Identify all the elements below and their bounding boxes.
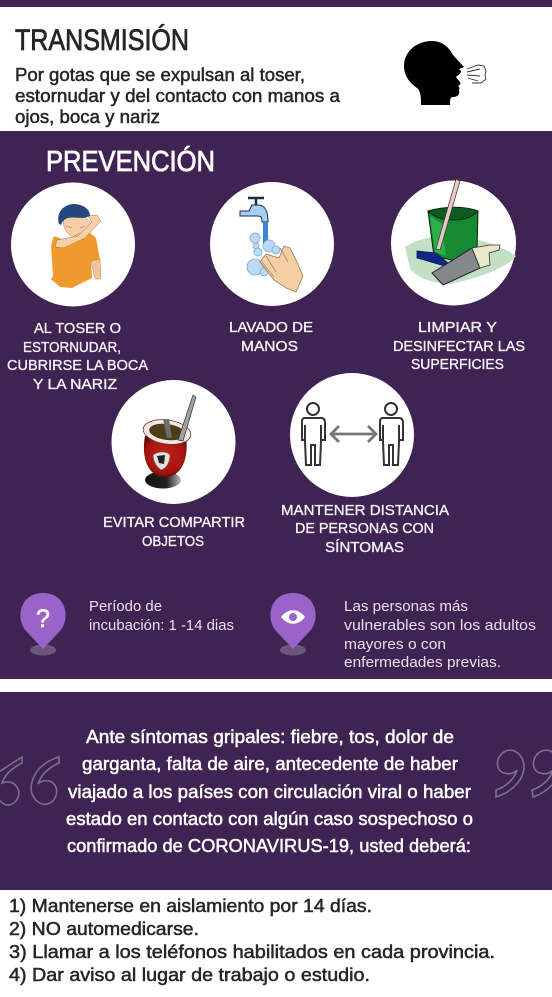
text block: cleaning label: LIMPIAR Y [418, 319, 497, 336]
text block: distance label [281, 502, 449, 556]
panel: transmission [0, 7, 552, 131]
text block: cover mouth label: ESTORNUDAR, [23, 339, 121, 356]
text block: instructions list: 4) Dar aviso al lugar de trabajo o estudio. [9, 965, 370, 985]
text block: transmission description: Por gotas que se expulsan al toser, [15, 65, 305, 85]
heading: transmission: TRANSMISIÓN [15, 24, 189, 57]
quote mark: right [496, 750, 552, 797]
quote mark: left [0, 757, 59, 805]
text block: incubation period: incubación: 1 -14 dias [89, 618, 234, 634]
text block: avoid sharing label: EVITAR COMPARTIR [103, 514, 245, 531]
text block: symptoms: estado en contacto con algún caso sospechoso o [66, 809, 473, 829]
text block: hand washing label: LAVADO DE [229, 319, 313, 336]
text block: symptoms: confirmado de CORONAVIRUS-19, usted deberá: [67, 836, 471, 856]
top band [0, 0, 552, 7]
text block: symptoms: Ante síntomas gripales: fiebre, tos, dolor de [86, 727, 454, 747]
text block: incubation period: Período de [89, 599, 162, 615]
text block: cover mouth label: AL TOSER O [34, 320, 121, 337]
text block: distance label: MANTENER DISTANCIA [281, 502, 449, 519]
icon: hand washing [210, 182, 334, 306]
text block: hand washing label [229, 319, 313, 355]
text block: vulnerable people: enfermedades previas. [344, 655, 501, 671]
icon: eye pin [270, 593, 316, 656]
text block: instructions list [9, 896, 495, 985]
text block: vulnerable people [344, 599, 536, 671]
text block: instructions list: 3) Llamar a los teléfonos habilitados en cada provincia. [9, 942, 495, 962]
icon: question pin [20, 593, 66, 656]
panel: symptoms [0, 692, 552, 890]
text block: cover mouth label: CUBRIRSE LA BOCA [7, 357, 148, 374]
heading: prevention: PREVENCIÓN [46, 145, 215, 178]
text block: vulnerable people: mayores o con [344, 637, 446, 653]
text block: symptoms: garganta, falta de aire, antecedente de haber [82, 754, 458, 774]
text block: distance label: DE PERSONAS CON [295, 520, 434, 537]
text block: vulnerable people: vulnerables son los adultos [344, 618, 536, 634]
text block: cleaning label: DESINFECTAR LAS [393, 338, 525, 355]
text block: instructions list: 1) Mantenerse en aislamiento por 14 días. [9, 896, 372, 916]
text block: avoid sharing label: OBJETOS [142, 533, 204, 550]
text block: avoid sharing label [103, 514, 245, 550]
icon: mate cup [112, 380, 236, 504]
icon: person coughing into elbow [11, 182, 135, 306]
text block: transmission description: estornudar y del contacto con manos a [15, 86, 341, 106]
text block: incubation period [89, 599, 234, 634]
text block: instructions list: 2) NO automedicarse. [9, 919, 199, 939]
text block: distance label: SÍNTOMAS [325, 539, 404, 556]
text block: symptoms [66, 727, 473, 856]
text block: symptoms: viajado a los países con circulación viral o haber [68, 782, 471, 802]
text block: hand washing label: MANOS [241, 338, 298, 355]
text block: cover mouth label [7, 320, 148, 393]
text block: cleaning label [393, 319, 525, 373]
text block: vulnerable people: Las personas más [344, 599, 468, 615]
text block: cover mouth label: Y LA NARIZ [33, 376, 117, 393]
panel: prevention [0, 131, 552, 679]
icon: two people with distance arrow [290, 373, 414, 497]
icon: question pin: ? [36, 605, 50, 633]
icon: head coughing [404, 41, 486, 105]
text block: transmission description: ojos, boca y nariz [15, 107, 160, 127]
icon: bucket and vacuum [391, 179, 516, 306]
text block: cleaning label: SUPERFICIES [411, 356, 504, 373]
text block: transmission description [15, 65, 341, 127]
